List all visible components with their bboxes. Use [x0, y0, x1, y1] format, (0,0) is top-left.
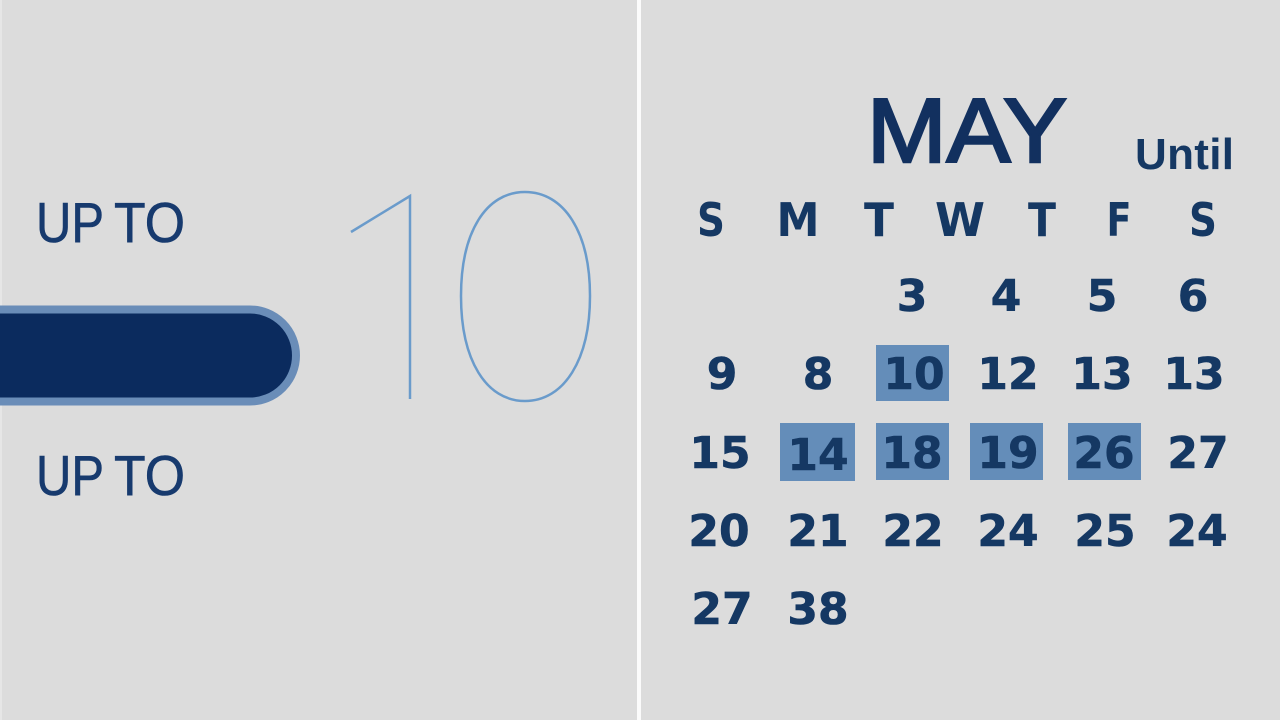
heading: first up to label: UP: [36, 191, 104, 255]
calendar dates: 9: [707, 349, 737, 400]
calendar dates: 18: [881, 428, 943, 479]
heading: first up to label: TO: [114, 191, 185, 255]
calendar dates: 10: [883, 349, 945, 400]
icon: navy rounded bar: [0, 310, 296, 402]
calendar dates: 27: [1167, 428, 1229, 479]
calendar dates: 12: [977, 349, 1039, 400]
calendar month title: MAY: [867, 81, 1067, 182]
heading: first up to label: [36, 191, 185, 255]
weekday header: S: [697, 193, 725, 247]
weekday header: M: [776, 193, 820, 247]
calendar dates: 13: [1071, 349, 1133, 400]
calendar dates: 27: [691, 584, 753, 635]
calendar dates: 25: [1074, 506, 1136, 557]
calendar dates: 5: [1087, 271, 1117, 322]
calendar dates: 14: [787, 430, 849, 481]
calendar dates: 24: [977, 506, 1039, 557]
calendar dates: 20: [688, 506, 750, 557]
calendar dates: 13: [1163, 349, 1225, 400]
big outlined number 10: [351, 192, 590, 401]
calendar dates: 38: [787, 584, 849, 635]
heading: second up to label: [36, 444, 185, 508]
calendar dates: 26: [1073, 428, 1135, 479]
right panel: May calendar: [688, 81, 1234, 635]
calendar dates: 22: [882, 506, 944, 557]
weekday header: T: [1028, 193, 1057, 247]
weekday header: S: [1189, 193, 1217, 247]
calendar dates: 4: [991, 271, 1021, 322]
weekday header: [697, 193, 1217, 247]
calendar dates: [688, 271, 1229, 635]
calendar dates: 15: [689, 428, 751, 479]
calendar dates: 24: [1166, 506, 1228, 557]
left panel: up to 10: [0, 191, 590, 508]
calendar dates: 3: [897, 271, 927, 322]
weekday header: F: [1106, 193, 1132, 247]
calendar dates: 21: [787, 506, 849, 557]
weekday header: W: [935, 193, 985, 247]
heading: second up to label: UP: [36, 444, 104, 508]
calendar dates: 19: [977, 428, 1039, 479]
weekday header: T: [864, 193, 895, 247]
calendar dates: 6: [1178, 271, 1208, 322]
highlighted date cells: [780, 345, 1141, 481]
heading: second up to label: TO: [114, 444, 185, 508]
calendar dates: 8: [803, 349, 833, 400]
until label: Until: [1135, 130, 1234, 179]
